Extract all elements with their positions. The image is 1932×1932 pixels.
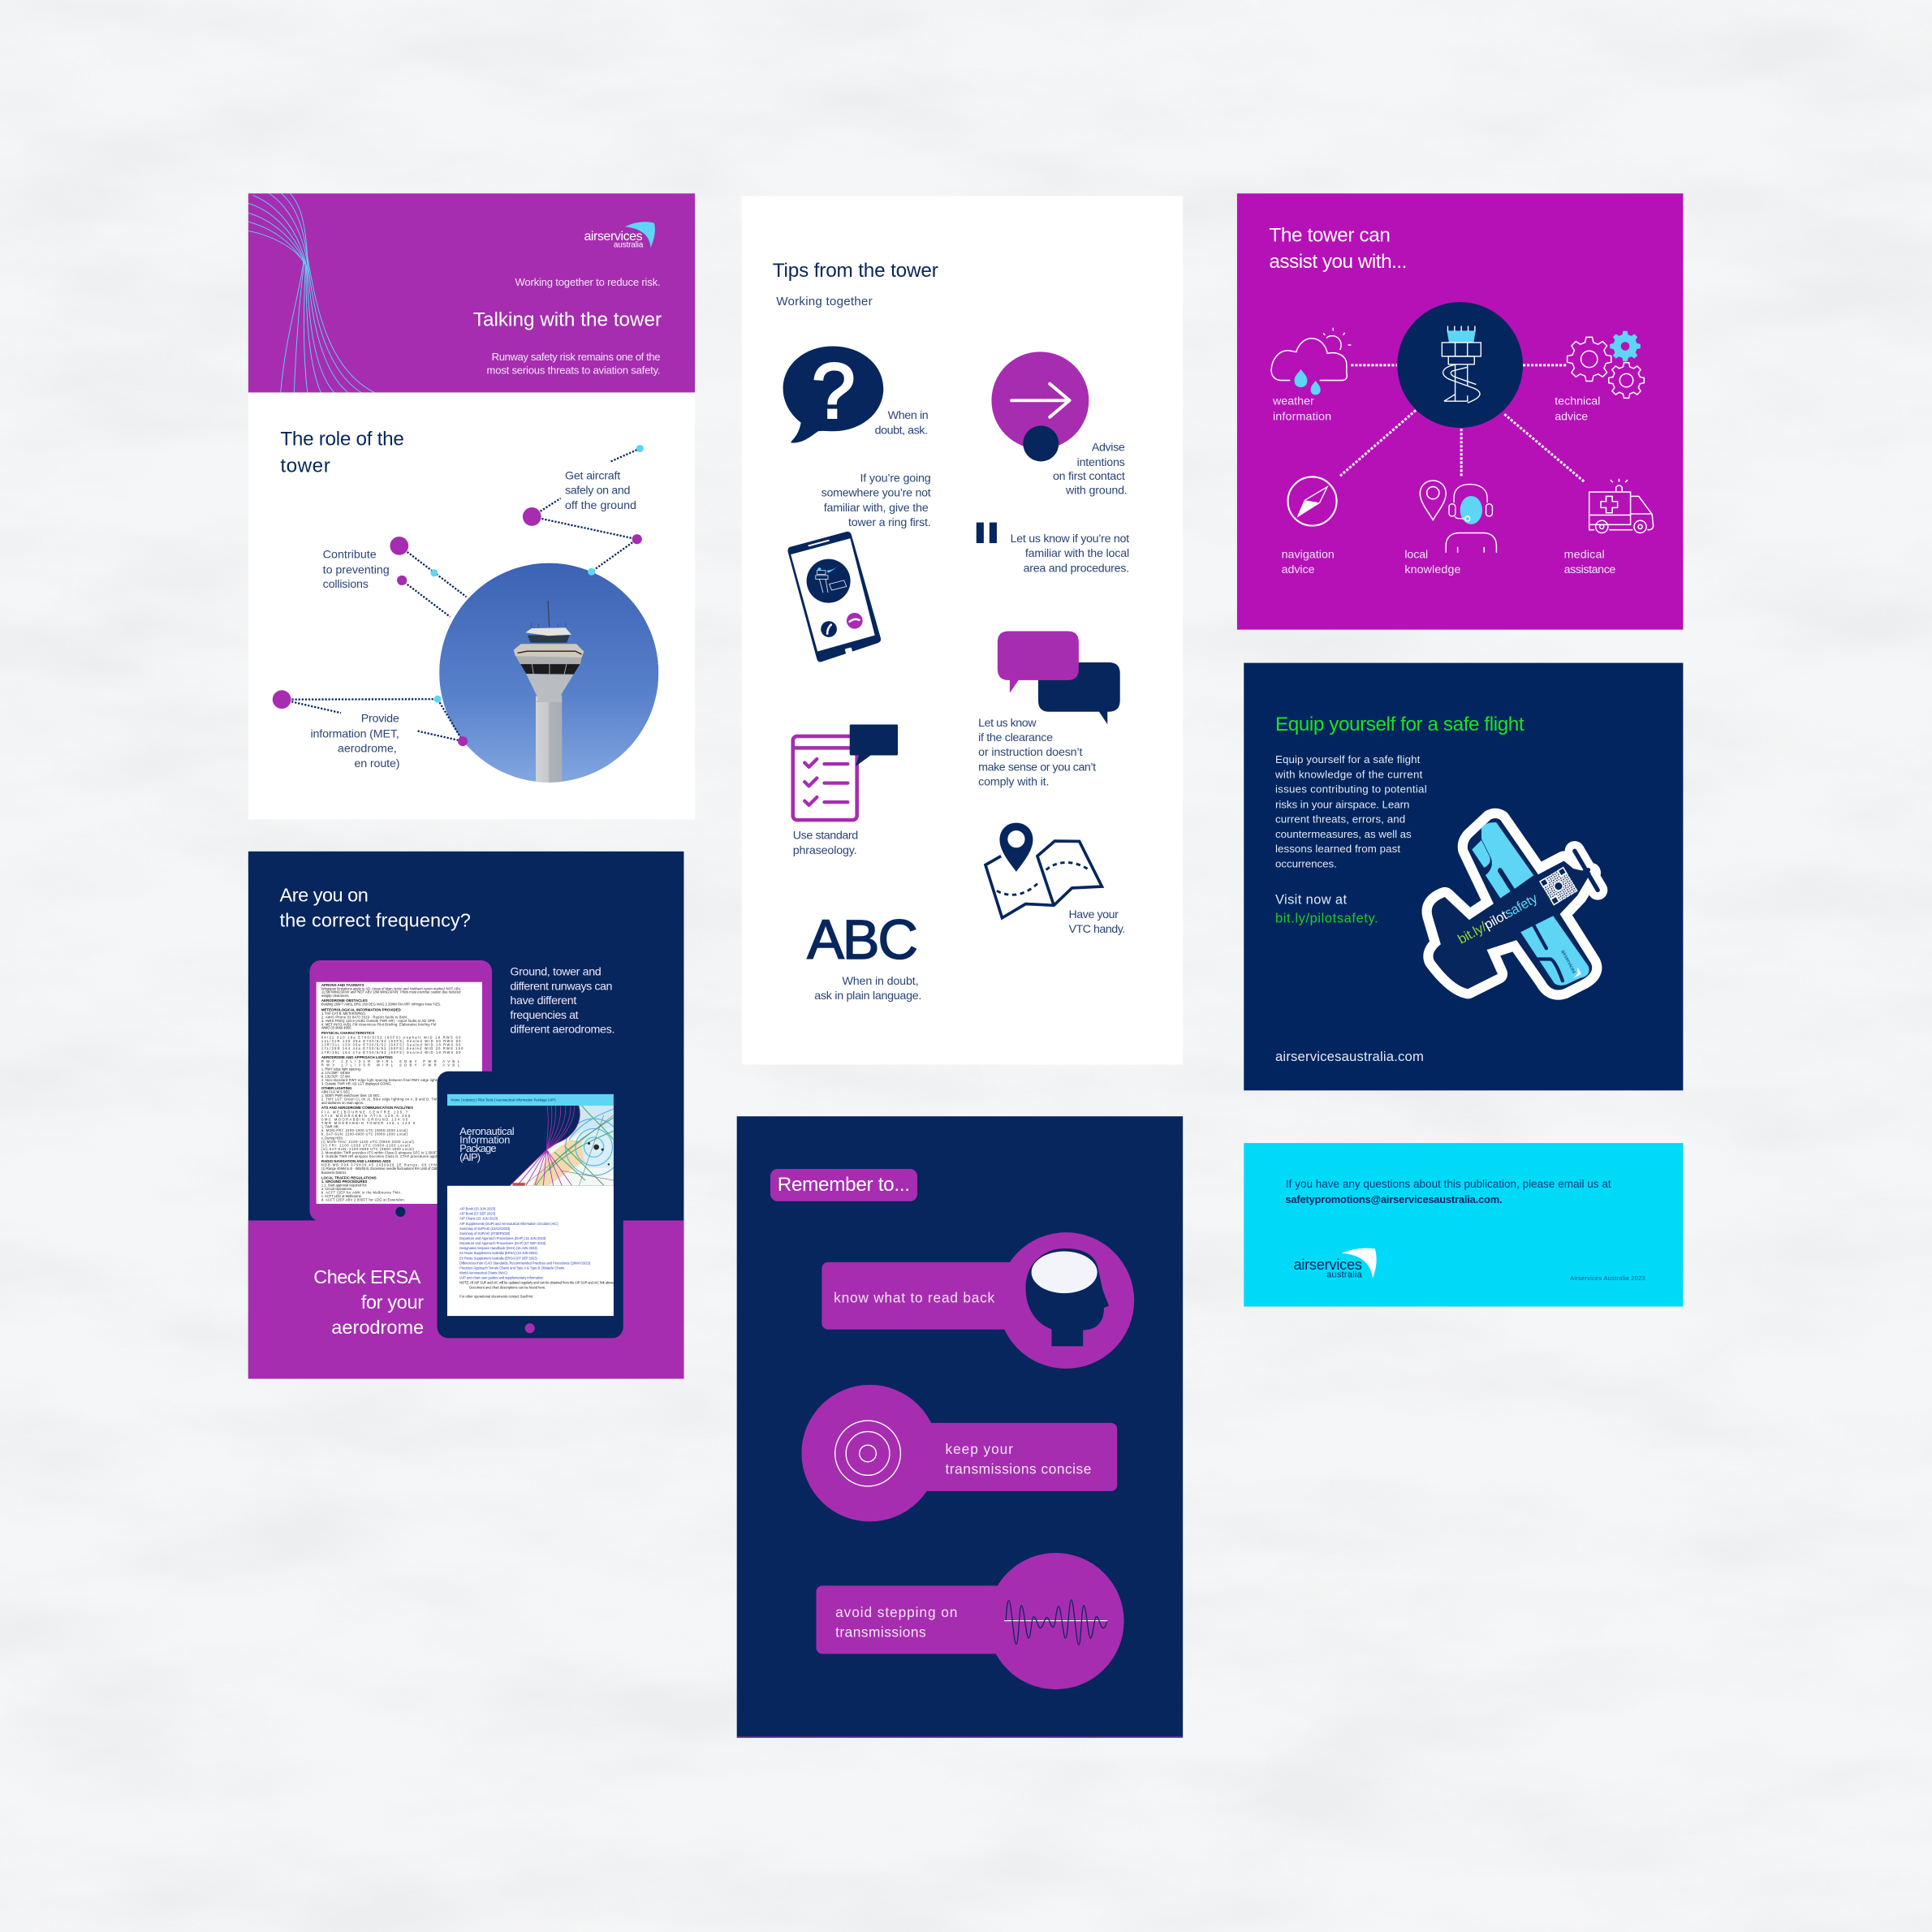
tablet: ERSA page: LOCAL TRAFFIC REGULATIONS	[321, 1176, 377, 1180]
tablet: ERSA page: ATS AND AERODROME COMMUNICATION FACILITIES	[321, 1106, 413, 1110]
dotted connectors	[1340, 365, 1585, 482]
tablet: ERSA page: 04/22 020 18a E700/5/52 (60FS) Asphalt WID 18 RWS 60	[321, 1036, 461, 1040]
item: keep transmissions concise: keep your	[945, 1441, 1013, 1457]
AIP link list	[459, 1207, 615, 1298]
text: let us know clearance: or instruction doesn’t	[978, 746, 1082, 759]
heading: the role of the tower: The role of the	[280, 429, 404, 451]
icon: arrow in circle	[991, 351, 1089, 461]
contact text: safetypromotions@airservicesaustralia.com.	[1285, 1193, 1503, 1205]
AIP link list: AIP Book (15 JUN 2023)	[459, 1207, 496, 1211]
icon: question speech bubble: ?	[812, 348, 855, 435]
tablet: ERSA page: 13L/31R 130 38a E700/5/52 (60FS) Sealed WID 30 RWS 60	[321, 1039, 461, 1043]
tablet: ERSA page: RWY 13L/31R MIRL SDBY PWR AVBL	[321, 1059, 460, 1063]
text: advise intentions: Advise	[1092, 442, 1125, 455]
heading: tips from the tower: Tips from the tower	[773, 260, 938, 282]
logo: airservices: airservices	[584, 230, 643, 244]
heading pill: remember to: Remember to...	[778, 1174, 910, 1196]
icon: head	[1025, 1248, 1109, 1346]
label: get aircraft: safely on and	[565, 485, 630, 498]
label: navigation advice: advice	[1282, 563, 1315, 576]
icon: checklist with bubble	[792, 724, 898, 820]
tablet: ERSA page: c. ACFT LDG at Melbourne.	[321, 1194, 362, 1198]
icon: ABC: ABC	[807, 909, 918, 971]
label: local knowledge: local	[1404, 549, 1428, 562]
logo: airservices: australia	[614, 240, 644, 249]
AIP link list: Departure and Approach Procedures (DAP) (07 SEP 2023)	[459, 1241, 546, 1245]
tablet: ERSA page: Wingspan limitations apply to AD. Areas of Main Apron and Northern Apron marked 'NOT ABV	[321, 986, 461, 990]
tablet: ERSA page: d. ACFT (2EP ABV 2,000FT for LDG at Essendon.	[321, 1198, 405, 1202]
text: when in doubt, ask: When in	[888, 409, 929, 422]
tablet: ERSA page: ATIS MOORABBIN ATIS 120.9 398	[321, 1114, 411, 1118]
item: avoid stepping on transmissions: transmissions	[835, 1624, 926, 1640]
tablet: ERSA page: PHYSICAL CHARACTERISTICS	[321, 1031, 374, 1035]
heading pill: remember to	[770, 1169, 917, 1201]
text: use standard phraseology: Use standard	[793, 830, 858, 843]
sticker wing panels	[1472, 822, 1589, 985]
text: let us know unfamiliar: familiar with the local	[1025, 547, 1129, 560]
heading: are you on the correct frequency: Are you on	[280, 884, 369, 905]
description text: have different	[510, 994, 576, 1007]
contact text	[1285, 1178, 1611, 1205]
text: let us know clearance: make sense or you can’t	[978, 761, 1096, 774]
header text	[473, 276, 662, 377]
paragraph: occurrences.	[1275, 857, 1337, 869]
sticker fuselage and wings	[1432, 818, 1592, 990]
label: provide information: information (MET,	[310, 727, 399, 740]
item: keep transmissions concise: transmissions concise	[945, 1460, 1091, 1477]
AIP link list: Departure and Approach Procedures (DAP) (15 JUN 2023)	[459, 1236, 546, 1240]
label: contribute: collisions	[323, 578, 369, 591]
heading: the tower can assist you with: The tower can	[1269, 224, 1391, 246]
label: weather information	[1272, 395, 1331, 424]
heading: the tower can assist you with: assist you with...	[1269, 251, 1407, 273]
tablet: ERSA page: b. ACFT (2EP for AWK in the Melbourne TMA.	[321, 1190, 402, 1194]
QR code	[1539, 867, 1578, 906]
text: give the tower a ring	[822, 472, 931, 529]
label: medical assistance: medical	[1564, 549, 1605, 562]
link: visit now	[1275, 893, 1378, 925]
tablet: ERSA page: 1. RWY edge light spacing:	[321, 1067, 361, 1071]
tablet: ERSA page: METEOROLOGICAL INFORMATION PROVIDED	[321, 1007, 401, 1011]
label: get aircraft	[565, 469, 636, 512]
label: technical advice: advice	[1555, 411, 1588, 424]
AIP title: Information	[459, 1134, 510, 1146]
tablet: ERSA page: 1. SDBY PWR switchover time: 15 SEC.	[321, 1093, 381, 1098]
text: let us know unfamiliar: area and procedures.	[1024, 562, 1129, 575]
text: when in doubt, ask: doubt, ask.	[875, 424, 928, 437]
icon: waveform	[1004, 1600, 1107, 1645]
tablet: ERSA page: wingtip clearances.	[321, 994, 350, 998]
text: have your VTC handy: VTC handy.	[1068, 923, 1125, 936]
heading: the tower can assist you with	[1269, 224, 1407, 273]
tablet: ERSA page: NDB MB 398 375836.45 1450926.2E Range: 60 (HN)	[321, 1163, 439, 1167]
dotted connectors and role nodes	[273, 445, 644, 746]
label: weather information: information	[1273, 411, 1331, 424]
logo: airservices	[584, 222, 655, 249]
tablet: ERSA page: a. Circuit Operations.	[321, 1187, 352, 1191]
label: medical assistance	[1564, 549, 1615, 576]
tablet: ERSA page: OTHER LIGHTING	[321, 1086, 352, 1090]
text: give the tower a ring: familiar with, give the	[824, 502, 929, 515]
icon: two speech bubbles	[998, 631, 1120, 724]
tablet: ERSA page: (1) Range 40NM to E - 065/05 B. Excessive needle fluctuations RH Until of CBD	[321, 1167, 438, 1171]
text: advise intentions: intentions	[1077, 456, 1125, 469]
tablet: AIP page	[438, 1072, 623, 1338]
purple flight lines	[510, 1106, 580, 1185]
panel: the tower can assist	[1237, 193, 1683, 630]
tablet: ERSA page: 1.1. Start approval required for:	[321, 1183, 367, 1187]
AIP link list: Differences from ICAO Standards, Recommended Practices and Procedures (18MAY2023)	[459, 1261, 591, 1265]
tablet: ERSA page: APRONS AND TAXIWAYS	[321, 983, 364, 987]
label: medical assistance: assistance	[1564, 563, 1615, 576]
AIP title: (AIP)	[459, 1151, 481, 1163]
AIP link list: NOTE: All AIP SUP and AIC will be updated regularly and can be obtained from the AIP SUP and AIC link above.	[459, 1281, 615, 1285]
tablet: ERSA page: FIA MELBOURNE CENTRE 135.7	[321, 1110, 408, 1114]
label: get aircraft: off the ground	[565, 499, 636, 512]
tablet: ERSA page: Building 265FT AMSL BRG 260 DEG MAG 2.33NM FM ARP. Infringes inner HZS.	[321, 1003, 441, 1007]
text: use standard phraseology	[793, 830, 858, 857]
paragraph: current threats, errors, and	[1275, 813, 1405, 825]
AIP link list: En Route Supplement Australia (ERSA) (15 JUN 2023)	[459, 1251, 537, 1255]
tablet: ERSA page: RADIO NAVIGATION AND LANDING AIDS	[321, 1159, 391, 1163]
logo: airservices: australia	[1326, 1270, 1363, 1280]
label: contribute: Contribute	[323, 549, 377, 562]
icon: question speech bubble	[783, 347, 883, 443]
label: navigation advice: navigation	[1282, 549, 1335, 562]
tablet: ERSA page: 3. Outside TWR HR airspace becomes Class G. CTAF procedures apply	[321, 1154, 439, 1158]
AIP title	[459, 1125, 515, 1163]
AIP link list: AIP Supplements (SUP) and Aeronautical Information Circulars (AIC)	[459, 1222, 558, 1226]
text: give the tower a ring: somewhere you’re not	[822, 487, 931, 500]
header text: Runway safety risk remains one of the	[492, 351, 661, 363]
item: know what to read back	[822, 1232, 1134, 1369]
AIP link list: Summary of SUP/AIC (10AUG2023)	[459, 1227, 511, 1231]
text: give the tower a ring: If you’re going	[860, 472, 931, 485]
paragraph: with knowledge of the current	[1274, 769, 1423, 781]
tablet: ERSA page: TWR MOORABBIN TOWER 118.1 123.0	[321, 1121, 416, 1125]
label: local knowledge: knowledge	[1404, 563, 1460, 576]
heading: are you on the correct frequency	[280, 884, 471, 930]
description text: frequencies at	[510, 1009, 579, 1022]
label: local knowledge	[1404, 549, 1460, 576]
AIP link list: AIP Book (07 SEP 2023)	[459, 1212, 496, 1216]
link: visit now: Visit now at	[1275, 893, 1347, 908]
header band	[248, 193, 695, 392]
hub: tower icon in circle	[1397, 302, 1523, 428]
tablet: ERSA page: a. MON-FRI: 2200-1000 UTC (0800-2000 Local)	[321, 1128, 408, 1132]
tablet: ERSA page: 4. MET INFO AVBL FM Airservices Pilot Briefing. Elaborative briefing FM	[321, 1022, 437, 1026]
tablet: ERSA page: (ii) FRI: 2100-1000 UTC (0800-2100 Local)	[321, 1143, 411, 1147]
logo: airservices	[1293, 1248, 1377, 1280]
text: ask in plain language	[814, 975, 921, 1003]
copyright: Airservices Australia 2023	[1570, 1274, 1645, 1282]
tablet: ERSA page: 1. TWR HR:	[321, 1125, 339, 1129]
AIP link list: Designated Airspace Handbook (DAH) (15 JUN 2023)	[459, 1246, 537, 1250]
description text	[510, 965, 615, 1037]
text: use standard phraseology: phraseology.	[793, 844, 857, 857]
icon: compass	[1287, 477, 1337, 526]
tablet: ERSA page: and taxilanes on main apron.	[321, 1101, 364, 1105]
tablet: ERSA page: 2. Non-standard RWY edge light spacing between final RWY edge lights and threshold.	[321, 1078, 463, 1082]
sticker white outline	[1432, 818, 1598, 990]
tablet: ERSA page: b. SAT-SUN: 2200-0900 UTC (0800-1900 Local)	[321, 1132, 408, 1136]
tablet: ERSA page: Business District.	[321, 1171, 347, 1175]
paragraph	[1274, 753, 1427, 869]
AIP link list: IAIP and chart user guides and supplementary information	[459, 1276, 543, 1280]
logo: airservices: airservices	[1293, 1257, 1362, 1273]
panel: contact footer	[1244, 1143, 1683, 1307]
item: avoid stepping on transmissions	[816, 1553, 1124, 1689]
AIP title: Package	[459, 1142, 497, 1154]
decorative flight lines	[248, 193, 376, 393]
icon: quotation marks	[977, 523, 997, 543]
tablet: ERSA page: 1. GROUND PROCEDURES	[321, 1179, 368, 1184]
tablet: ERSA page: 2. Moorabbin TWR provides ATS within Class D airspace SFC to 2,500FT	[321, 1150, 439, 1154]
icon: ambulance	[1589, 479, 1654, 533]
heading: equip yourself for a safe flight: Equip yourself for a safe flight	[1275, 714, 1524, 735]
AIP link list: En Route Supplement Australia (ERSA) (07 SEP 2023)	[459, 1256, 537, 1260]
link: visit now: bit.ly/pilotsafety.	[1275, 911, 1378, 925]
panel: equip yourself	[1244, 663, 1683, 1090]
callout: check ERSA: aerodrome	[331, 1317, 424, 1338]
subheading: working together: Working together	[776, 295, 873, 308]
text: advise intentions	[1053, 442, 1128, 498]
AIP link list: Document and chart descriptions can be found here.	[469, 1286, 546, 1290]
icon: smartphone call	[788, 532, 881, 662]
paragraph: issues contributing to potential	[1275, 783, 1427, 796]
tablet: ERSA page: 17L/35R 164 44a E700/5/52 (60FS) Sealed WID 30 RWS 150	[321, 1046, 464, 1050]
AIP link list: Precision Approach Terrain Charts and Type A & Type B Obstacle Charts	[459, 1266, 564, 1270]
header text: Working together to reduce risk.	[515, 276, 661, 288]
label: get aircraft: Get aircraft	[565, 469, 620, 482]
icon: concentric rings	[835, 1421, 900, 1486]
header text: most serious threats to aviation safety.	[487, 364, 661, 377]
label: technical advice	[1555, 395, 1600, 424]
tablet: ERSA page: 1. TAF CAT B, METAR/SPECI.	[321, 1011, 366, 1016]
icon: gears	[1568, 331, 1644, 398]
AIP link list: World Aeronautical Charts (WAC)	[459, 1270, 508, 1274]
text: let us know clearance: Let us know	[978, 717, 1037, 730]
tablet: ERSA page: 13R/31L 130 35a E700/5/52 (60FS) Sealed WID 18 RWS 60	[321, 1043, 461, 1047]
tablet: AIP page: Home | Industry | Pilot Tools | Aeronautical Information Package (AIP)	[451, 1098, 556, 1102]
illustration: plane sticker: airservices	[1559, 949, 1577, 975]
tablet: ERSA page: SMC MOORABBIN GROUND 134.05	[321, 1117, 408, 1121]
icon: map with pin	[985, 823, 1102, 918]
item: keep transmissions concise	[801, 1385, 1117, 1521]
description text: Ground, tower and	[510, 965, 602, 978]
label: technical advice: technical	[1555, 395, 1600, 408]
description text: different runways can	[510, 980, 612, 993]
heading: are you on the correct frequency: the correct frequency?	[280, 909, 471, 930]
tablet: ERSA page: a. 17L/35R - 58.5M	[321, 1071, 350, 1075]
text: advise intentions: with ground.	[1065, 485, 1128, 498]
description text: different aerodromes.	[510, 1024, 615, 1037]
tablet: ERSA page: 3. Outside TWR HR, AD LGT displayed GOING.	[321, 1081, 392, 1085]
tablet: ERSA page: AERODROME OBSTACLES	[321, 998, 368, 1003]
icon: local knowledge pin and headset	[1420, 481, 1496, 553]
text: let us know clearance: comply with it.	[978, 776, 1049, 789]
website: airservicesaustralia.com	[1275, 1049, 1424, 1064]
label: navigation advice	[1282, 549, 1335, 576]
tablet: ERSA page: b. 13L/31R - 57.9M.	[321, 1074, 351, 1078]
item: know what to read back: know what to read back	[834, 1290, 995, 1306]
label: provide information: Provide	[361, 712, 399, 725]
text: let us know clearance	[978, 717, 1096, 789]
tablet: ERSA page: (i) MON-THU: 2100-1100 UTC (0800-2000 Local)	[321, 1140, 414, 1144]
text: ask in plain language: ask in plain language.	[814, 990, 921, 1003]
paragraph: Equip yourself for a safe flight	[1275, 753, 1421, 765]
heading: the role of the tower: tower	[280, 455, 330, 477]
text: give the tower a ring: tower a ring first.	[848, 516, 931, 529]
text: have your VTC handy	[1068, 908, 1125, 936]
tablet: ERSA page: ABN FLG W 5 SEC	[321, 1089, 350, 1093]
tablet: ERSA page	[309, 960, 492, 1222]
AIP link list: AIP Charts (15 JUN 2023)	[459, 1217, 498, 1221]
panel: remember to	[737, 1116, 1183, 1738]
label: weather information: weather	[1272, 395, 1314, 408]
tablet: ERSA page: AERODROME AND APPROACH LIGHTING	[321, 1055, 393, 1059]
illustration: plane sticker	[1432, 818, 1598, 990]
label: provide information	[310, 712, 400, 770]
tablet: ERSA page: 11.5M WINGSPAN' and 'NOT ABV 18M WINGSPAN'. Pilots must exercise caution due reduced	[321, 990, 460, 994]
paragraph: risks in your airspace. Learn	[1275, 798, 1409, 810]
callout: check ERSA: for your	[361, 1292, 424, 1313]
label: provide information: en route)	[354, 757, 400, 770]
label: contribute: to preventing	[323, 564, 390, 577]
text: let us know unfamiliar	[1011, 533, 1129, 575]
paragraph: lessons learned from past	[1275, 843, 1400, 855]
text: ask in plain language: When in doubt,	[842, 975, 919, 988]
AIP link list: Summary of SUP/AIC (07SEP2023)	[459, 1231, 511, 1236]
heading: the role of the tower	[280, 429, 404, 477]
text: let us know clearance: if the clearance	[978, 731, 1053, 744]
AIP link list: For other operational documents contact SasPrint.	[459, 1294, 533, 1298]
AIP title: Aeronautical	[459, 1125, 515, 1137]
tablet: ERSA page: 3. AWIS FREQ 120.9 (AVBL Outside TWR HR) - report faults to AD OPR.	[321, 1019, 436, 1023]
paragraph: countermeasures, as well as	[1275, 828, 1412, 840]
sticker text: bit.ly/pilotsafety	[1455, 891, 1541, 947]
tablet: ERSA page: 17R/35L 164 47a E700/5/52 (60FS) Sealed WID 18 RWS 50	[321, 1050, 461, 1054]
tower photo	[439, 563, 658, 788]
icon: weather cloud	[1271, 328, 1351, 395]
tablet: ERSA page: 2. AWIS Phone 03 8470 3319 - Report faults to BoM.	[321, 1016, 408, 1020]
panel: correct frequency	[248, 852, 684, 1378]
callout: check ERSA: Check ERSA	[313, 1266, 421, 1287]
callout: check ERSA	[313, 1266, 424, 1338]
tablet: ERSA page: c. During HDS:	[321, 1136, 343, 1140]
text: have your VTC handy: Have your	[1068, 908, 1119, 921]
text: when in doubt, ask	[875, 409, 929, 437]
chart image	[510, 1106, 614, 1186]
panel: tips from the tower	[742, 196, 1183, 1064]
label: provide information: aerodrome,	[338, 743, 397, 756]
panel: talking with the tower	[248, 193, 695, 819]
label: contribute	[323, 549, 390, 591]
text: advise intentions: on first contact	[1053, 470, 1125, 483]
header text: Talking with the tower	[473, 308, 662, 330]
text: let us know unfamiliar: Let us know if you’re not	[1011, 533, 1129, 546]
tablet: ERSA page: RWY 17L/35R MIRL SDBY PWR AVBL	[321, 1063, 460, 1067]
tablet: ERSA page: 2. TWY LGT: Green CL on J1. Blue edge lighting on A, B and D. TWY CL green.	[321, 1097, 457, 1101]
item: avoid stepping on transmissions: avoid stepping on	[835, 1604, 957, 1620]
contact text: If you have any questions about this publication, please email us at	[1286, 1178, 1611, 1190]
tablet: ERSA page: WMO 03 9669 4850.	[321, 1026, 351, 1030]
tablet: ERSA page: (iii) SAT-SUN: 2100-0800 UTC (0800-1900 Local)	[321, 1147, 414, 1151]
